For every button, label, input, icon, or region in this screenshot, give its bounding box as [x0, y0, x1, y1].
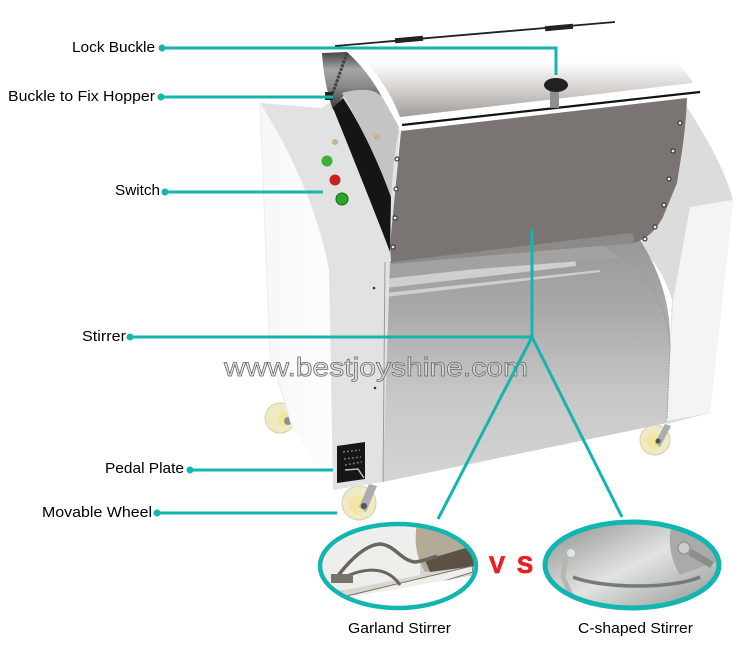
buckle to fix hopper — [325, 92, 333, 100]
stirrer shaft bars — [385, 243, 620, 297]
callout: switch: Switch — [115, 182, 160, 199]
callout: switch — [115, 182, 323, 199]
drum outline — [627, 258, 670, 418]
inset: c-shaped stirrer — [545, 522, 721, 637]
inset: garland stirrer — [320, 524, 476, 637]
callout: lock buckle — [72, 39, 556, 75]
callout: pedal plate — [105, 460, 333, 477]
lid black edge — [402, 92, 700, 125]
top rod with hinges — [335, 22, 615, 46]
callout: buckle to fix hopper — [8, 88, 333, 105]
hopper lower lip — [392, 233, 634, 264]
left white side — [260, 103, 333, 490]
vs label: S — [517, 552, 533, 579]
callout: movable wheel — [42, 504, 337, 521]
inset: garland stirrer: Garland Stirrer — [348, 620, 451, 637]
wheel: rear left — [265, 403, 295, 433]
vs label: V — [489, 552, 505, 579]
lower drum — [383, 240, 670, 482]
lock rod — [332, 53, 347, 95]
callout: movable wheel: Movable Wheel — [42, 504, 152, 521]
wheel: front — [342, 484, 377, 520]
left front panel — [260, 90, 400, 490]
hopper rivets — [391, 121, 682, 249]
wheel: rear right — [640, 424, 671, 455]
right side body — [633, 107, 733, 424]
left side outline shading — [260, 103, 293, 430]
screws — [332, 134, 380, 145]
callout: stirrer — [82, 229, 622, 519]
callout: lock buckle: Lock Buckle — [72, 39, 155, 56]
inset: c-shaped stirrer: C-shaped Stirrer — [578, 620, 693, 637]
switch buttons — [322, 156, 348, 205]
lid — [350, 22, 693, 117]
knob — [544, 78, 568, 108]
lid end plate light — [342, 90, 399, 197]
hopper front plate — [390, 98, 687, 263]
vs label — [489, 552, 533, 579]
machine illustration — [260, 22, 733, 520]
watermark: www.bestjoyshine.com — [223, 352, 528, 382]
lid end cap — [322, 52, 388, 110]
hopper dark crescent — [333, 98, 391, 252]
front panel divider — [383, 262, 385, 482]
panel holes — [373, 287, 376, 389]
callout: buckle to fix hopper: Buckle to Fix Hopper — [8, 88, 155, 105]
callout: stirrer: Stirrer — [82, 328, 126, 345]
callout: pedal plate: Pedal Plate — [105, 460, 184, 477]
pedal plate box — [337, 442, 365, 483]
